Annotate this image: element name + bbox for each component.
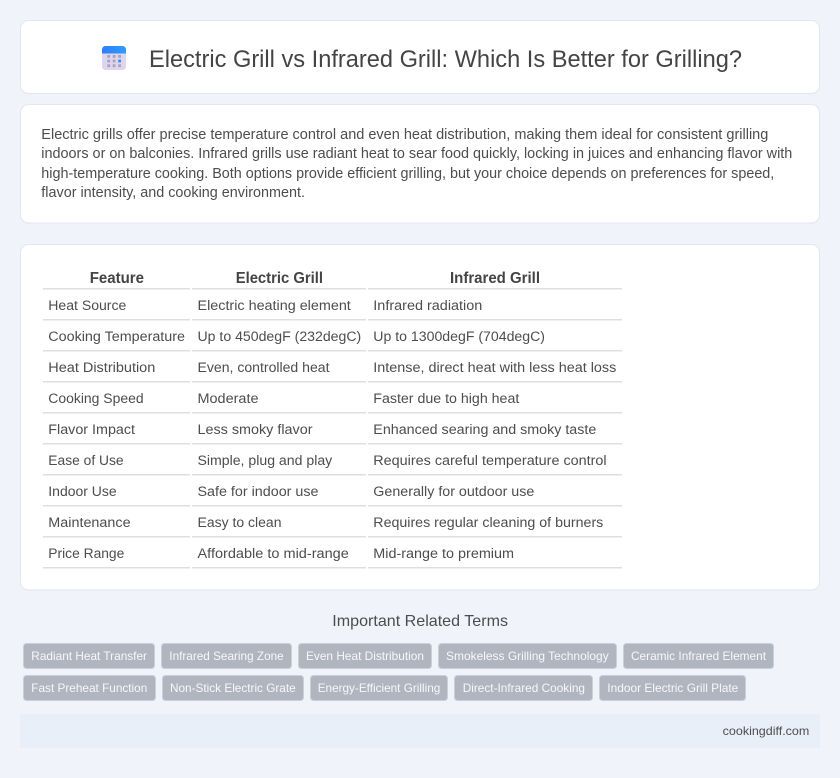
tag: energy-efficient grilling: Energy-Efficient Grilling [318,681,440,695]
panel: related term tags [24,644,774,700]
text block: summary paragraph: flavor intensity, and cooking environment. [41,185,305,201]
row: maintenance: Requires regular cleaning of burners [373,515,603,531]
row: maintenance [48,515,603,531]
table header row: Infrared Grill [450,270,540,287]
tag: radiant heat transfer [24,644,154,668]
row: ease of use: Simple, plug and play [198,453,333,469]
row: heat source: Infrared radiation [373,298,482,314]
row: flavor impact: Flavor Impact [48,422,135,438]
tag: ceramic infrared element [624,644,774,668]
tag: even heat distribution [298,644,432,668]
tag: fast preheat function [24,676,156,700]
row: heat distribution [48,360,616,376]
tag: smokeless grilling technology [438,644,616,668]
footer source text: cookingdiff.com [723,724,809,738]
row: cooking temperature: Cooking Temperature [48,329,185,345]
tag: smokeless grilling technology: Smokeless Grilling Technology [446,649,609,663]
row: ease of use: Ease of Use [48,453,124,469]
row: cooking speed: Cooking Speed [48,391,144,407]
tag: infrared searing zone: Infrared Searing Zone [169,649,284,663]
row: flavor impact: Less smoky flavor [198,422,313,438]
tag: direct-infrared cooking: Direct-Infrared Cooking [463,681,585,695]
tag: direct-infrared cooking [454,676,592,700]
text block: summary paragraph [41,127,792,201]
row: cooking temperature [48,329,545,345]
tag: fast preheat function: Fast Preheat Function [31,681,147,695]
tag: radiant heat transfer: Radiant Heat Transfer [31,649,147,663]
row: flavor impact [48,422,596,438]
tag: even heat distribution: Even Heat Distribution [306,649,424,663]
row: cooking speed: Moderate [198,391,259,407]
panel: title header [20,20,820,94]
row: heat distribution: Intense, direct heat with less heat loss [373,360,616,376]
tag: infrared searing zone [162,644,292,668]
row: flavor impact: Enhanced searing and smoky taste [373,422,596,438]
row: price range: Affordable to mid-range [198,546,349,562]
row: cooking speed: Faster due to high heat [373,391,519,407]
text block: summary paragraph: indoors or on balconies. Infrared grills use radiant heat to sear food quickly, locking in juices and enhancing flavor with [41,146,792,162]
tag: non-stick electric grate [162,676,304,700]
row: indoor use: Generally for outdoor use [373,484,534,500]
panel: comparison table [20,244,820,590]
tag: indoor electric grill plate [600,676,746,700]
row: ease of use [48,453,607,469]
row: heat source: Heat Source [48,298,126,314]
table header row: Feature [90,270,144,287]
row: maintenance: Maintenance [48,515,131,531]
row: price range: Mid-range to premium [373,546,514,562]
row: price range: Price Range [48,546,124,562]
tag: energy-efficient grilling [310,676,448,700]
row: indoor use: Safe for indoor use [198,484,319,500]
row: cooking temperature: Up to 450degF (232degC) [198,329,361,345]
row: cooking temperature: Up to 1300degF (704degC) [373,329,545,345]
heading: important related terms: Important Related Terms [332,613,508,630]
icon: calendar [102,46,126,70]
row: heat distribution: Heat Distribution [48,360,155,376]
row: heat distribution: Even, controlled heat [198,360,330,376]
text block: summary paragraph: Electric grills offer precise temperature control and even heat distribution, making them ideal for consistent grilling [41,127,768,143]
title: Electric Grill vs Infrared Grill: Which Is Better for Grilling? [149,46,742,73]
panel: summary [20,104,820,223]
table header row [90,270,540,287]
table header row: Electric Grill [236,270,323,287]
row: indoor use [48,484,534,500]
text block: summary paragraph: high-temperature cooking. Both options provide efficient grilling, but your choice depends on preferences for speed, [41,166,774,182]
tag: indoor electric grill plate: Indoor Electric Grill Plate [607,681,739,695]
row: indoor use: Indoor Use [48,484,117,500]
row: ease of use: Requires careful temperature control [373,453,607,469]
tag: non-stick electric grate: Non-Stick Electric Grate [170,681,296,695]
row: price range [48,546,514,562]
row: maintenance: Easy to clean [198,515,282,531]
row: heat source: Electric heating element [198,298,351,314]
row: cooking speed [48,391,519,407]
tag: ceramic infrared element: Ceramic Infrared Element [631,649,767,663]
footer bar [20,714,820,748]
row: heat source [48,298,482,314]
